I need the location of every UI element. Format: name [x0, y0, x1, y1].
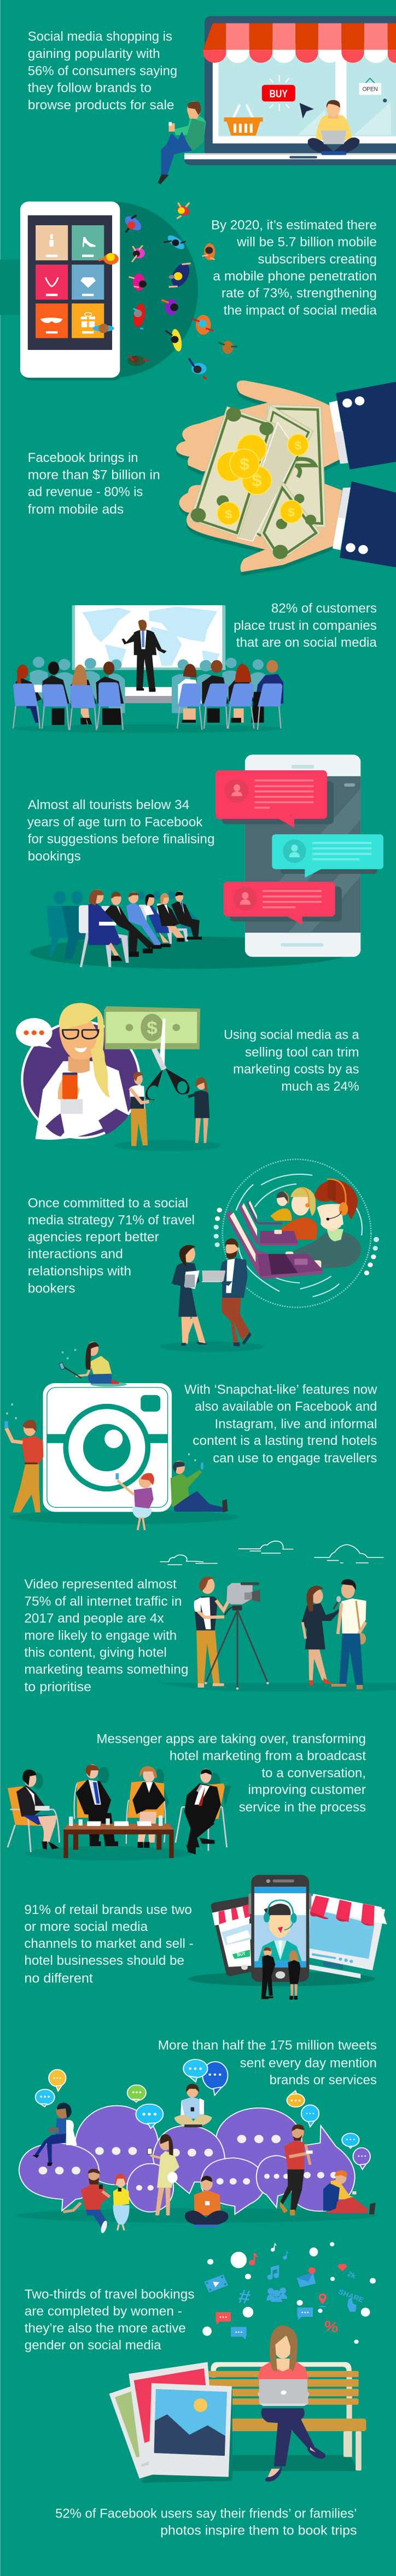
text: tweets: brands or services	[270, 2073, 377, 2087]
coins: $	[294, 439, 302, 452]
audience silhouettes	[30, 657, 266, 713]
text: shopping	[28, 30, 177, 113]
section 2: revenue and trust	[13, 380, 396, 733]
seated panellist 1	[8, 1770, 60, 1852]
ground shadow	[16, 2208, 377, 2223]
button: buy	[262, 75, 295, 111]
text: facebook photos	[55, 2506, 357, 2538]
text: mobile subscribers	[211, 218, 377, 318]
text: strategy: agencies report better	[28, 1230, 159, 1245]
text: messenger: improving customer	[248, 1783, 366, 1797]
text: snapchat features: also available on Facebook and	[195, 1400, 377, 1414]
ground shadow	[160, 1342, 264, 1352]
icons: chat	[216, 2308, 313, 2340]
text: trust: that are on social media	[236, 636, 377, 650]
text: snapchat features: With ‘Snapchat-like’ features now	[184, 1383, 377, 1397]
social media icons	[202, 2242, 376, 2344]
text: trust: place trust in companies	[234, 619, 377, 633]
illustration: panel discussion	[8, 1764, 231, 1860]
text: facebook revenue: from mobile ads	[28, 502, 124, 517]
sign: open: OPEN	[363, 86, 378, 92]
seated panellist 4	[176, 1769, 227, 1854]
icon: instagram style camera	[43, 1383, 172, 1512]
text: mobile subscribers: rate of 73%, strengthening	[222, 286, 377, 301]
ground shadow under people	[115, 1140, 221, 1151]
person: reporter	[302, 1585, 341, 1685]
text: video: to prioritise	[24, 1680, 91, 1694]
text: strategy	[28, 1196, 195, 1296]
icon: share	[337, 2287, 365, 2312]
ground shadow	[30, 936, 349, 969]
text: trust: 82% of customers	[271, 601, 377, 616]
text: facebook revenue: more than $7 billion in	[28, 468, 160, 482]
sign: open	[359, 78, 387, 102]
text: snapchat features	[184, 1383, 377, 1466]
illustration: call centre circle	[214, 1160, 379, 1307]
text: messenger: Messenger apps are taking over, transforming	[96, 1732, 366, 1746]
icon: cursor	[300, 103, 314, 119]
text: video: 2017 and people are 4x	[24, 1612, 164, 1626]
person: man in red shirt	[4, 1404, 43, 1512]
landscape photo	[148, 2383, 232, 2477]
person: woman sitting front	[115, 1473, 154, 1530]
coins: $	[288, 506, 295, 519]
person: bearded man	[201, 1239, 252, 1346]
text: mobile subscribers: By 2020, it’s estimated there	[211, 218, 377, 232]
text: trust	[234, 601, 377, 650]
text: selling tool: much as 24%	[281, 1080, 359, 1094]
text: women: they’re also the more active	[25, 2321, 186, 2335]
section 7: women travellers and photos	[25, 2242, 376, 2538]
cyan bubble	[272, 834, 383, 877]
illustration: phone with shop tiles	[20, 202, 122, 380]
illustration: shop front laptop	[184, 16, 396, 165]
person: business woman	[172, 1245, 207, 1346]
text: facebook revenue	[28, 451, 160, 517]
left phone	[211, 1896, 253, 1976]
camera on tripod	[205, 1582, 269, 1690]
text: retail brands: channels to market and sell -	[24, 1936, 194, 1951]
people seen from above	[93, 203, 237, 379]
illustration: presentation with audience	[13, 605, 283, 733]
bubble shadows	[222, 781, 377, 922]
text: selling tool: selling tool can trim	[245, 1045, 359, 1059]
text: snapchat features: Instagram, live and informal	[214, 1417, 377, 1431]
text: strategy: interactions and	[28, 1247, 123, 1261]
small man	[129, 1072, 149, 1146]
text: messenger: hotel marketing from a broadcast	[170, 1749, 366, 1763]
ground shadow: camera scene	[9, 1510, 238, 1524]
button: buy: BUY	[270, 89, 288, 100]
text: video: this content, giving hotel	[24, 1646, 167, 1660]
coins: $	[225, 508, 232, 521]
couple looking at phone	[261, 1947, 300, 2000]
text: shopping: they follow brands to	[28, 81, 152, 96]
text: facebook revenue: Facebook brings in	[28, 451, 138, 465]
text: tourists	[27, 798, 214, 864]
seated panellist 2	[74, 1764, 125, 1846]
section 3: facebook suggestions	[16, 754, 383, 1151]
icon: heart count	[338, 2264, 358, 2280]
agent on screen	[258, 1900, 302, 1961]
text: women: are completed by women -	[25, 2304, 182, 2319]
icon: location pin	[319, 2293, 327, 2307]
person: woman in yellow	[113, 2174, 130, 2230]
icon: shopping basket	[224, 106, 263, 136]
illustration: big chat bubbles	[19, 2106, 355, 2214]
text: mobile subscribers: a mobile phone penetration	[213, 270, 377, 284]
text: snapchat features: content is a lasting trend hotels	[193, 1434, 377, 1448]
text: strategy: relationships with	[28, 1264, 131, 1279]
text: facebook photos: photos inspire them to book trips	[160, 2523, 357, 2538]
coins	[217, 434, 308, 525]
left phone: BUY	[236, 1951, 246, 1958]
person: bearded man with phone	[63, 2169, 110, 2234]
text: retail brands: hotel businesses should be	[24, 1953, 184, 1968]
text: video: marketing teams something	[24, 1662, 188, 1677]
text: strategy: Once committed to a social	[28, 1196, 188, 1210]
person: woman on bench	[258, 2325, 325, 2481]
platform	[124, 687, 174, 696]
text: women	[25, 2287, 195, 2352]
text: messenger: service in the process	[239, 1800, 366, 1814]
operator large	[226, 1179, 361, 1279]
seated panellist 3	[126, 1766, 165, 1848]
text: tweets	[158, 2038, 377, 2087]
text: shopping: browse products for sale	[28, 98, 174, 113]
text: messenger: to a conversation,	[261, 1766, 366, 1781]
text: facebook photos: 52% of Facebook users say their friends’ or families’	[55, 2506, 357, 2521]
text: messenger	[96, 1732, 366, 1814]
icon: hashtag: #	[237, 2285, 252, 2308]
person: man sitting on bubble	[174, 2084, 212, 2127]
text: tweets: More than half the 175 million tweets	[158, 2038, 377, 2053]
person: woman in dress	[148, 2134, 179, 2215]
person: cameraman	[194, 1577, 229, 1688]
illustration: devices with shop	[211, 1875, 387, 2000]
icons: music notes	[249, 2243, 288, 2280]
band behind phone	[0, 260, 25, 315]
text: tourists: bookings	[28, 850, 81, 864]
text: snapchat features: can use to engage travellers	[213, 1451, 377, 1466]
map board	[72, 605, 225, 670]
coins: $	[252, 471, 262, 490]
text: strategy: media strategy 71% of travel	[28, 1213, 195, 1227]
presenter	[122, 619, 167, 692]
ground shadow	[159, 1683, 396, 1691]
scissors	[145, 1018, 190, 1100]
text: retail brands: 91% of retail brands use two	[24, 1902, 192, 1917]
illustration: bench	[207, 2362, 366, 2471]
section 4: strategy and snapchat	[4, 1160, 379, 1530]
text: shopping: Social media shopping is	[28, 30, 172, 44]
person: girl with selfie stick	[59, 1342, 127, 1387]
people	[89, 889, 202, 961]
text: video: Video represented almost	[24, 1577, 177, 1591]
text: retail brands	[24, 1902, 194, 1986]
text: women: gender on social media	[25, 2338, 161, 2352]
red bubble lower	[224, 882, 335, 925]
red photo	[129, 2362, 214, 2467]
text: mobile subscribers: the impact of social media	[224, 303, 377, 318]
person: man with laptop	[308, 100, 359, 155]
illustration: photo prints	[109, 2362, 232, 2483]
illustration: phone with chat bubbles	[216, 754, 383, 957]
person: bearded man standing	[280, 2124, 313, 2215]
clouds	[160, 1541, 383, 1565]
section 1: online shop laptop	[0, 16, 396, 380]
text: shopping: gaining popularity with	[28, 47, 160, 61]
text: selling tool: marketing costs by as	[233, 1062, 359, 1076]
section 5: video and messenger	[8, 1541, 396, 1860]
icon: envelope	[297, 2267, 316, 2287]
banknotes	[189, 405, 326, 562]
person: man in orange	[185, 2176, 228, 2227]
person: sitting man with backpack	[323, 2170, 376, 2214]
text: video	[24, 1577, 188, 1694]
text: tourists: for suggestions before finalising	[28, 832, 214, 846]
icon: percent: %	[323, 2318, 340, 2336]
person: interviewee	[331, 1579, 366, 1689]
operator middle	[238, 1187, 318, 1246]
illustration: seated people row	[46, 889, 202, 967]
icon: video film	[204, 2274, 228, 2292]
person: man sitting in green	[171, 1454, 228, 1512]
text: facebook revenue: ad revenue - 80% is	[28, 485, 143, 499]
text: women: Two-thirds of travel bookings	[25, 2287, 195, 2302]
person: man on phone	[158, 101, 206, 184]
text: tweets: sent every day mention	[240, 2056, 377, 2070]
bubble dots	[39, 2135, 337, 2191]
text: mobile subscribers: will be 5.7 billion mobile	[236, 235, 377, 249]
text: mobile subscribers: subscribers creating	[258, 252, 377, 267]
illustration: hands holding money	[176, 380, 396, 576]
text: selling tool	[224, 1028, 359, 1094]
centre phone	[248, 1875, 311, 1982]
banknote	[104, 1006, 200, 1049]
monitor	[310, 1894, 387, 1978]
seated audience	[13, 660, 283, 730]
green photo	[109, 2380, 188, 2479]
illustration: woman and scissors cutting money	[16, 1003, 221, 1151]
text: tourists: years of age turn to Facebook	[27, 815, 203, 829]
woman portrait	[58, 1003, 110, 1114]
speech bubble	[16, 1018, 53, 1048]
text: video: 75% of all internet traffic in	[24, 1595, 182, 1609]
text: selling tool: Using social media as a	[224, 1028, 359, 1042]
text: tourists: Almost all tourists below 34	[28, 798, 190, 812]
small woman	[188, 1078, 209, 1143]
text: shopping: 56% of consumers saying	[28, 64, 177, 78]
person: woman with tablet	[32, 2103, 77, 2166]
section 6: retail brands and tweets	[16, 1875, 387, 2234]
shadow circle	[24, 202, 198, 378]
chairs	[79, 904, 188, 967]
text: video: more likely to engage with	[24, 1629, 177, 1643]
ground shadow	[188, 1971, 375, 1986]
shadows	[33, 1767, 231, 1812]
icon: heart count: 2k	[346, 2270, 358, 2280]
chairs	[13, 682, 282, 708]
text: retail brands: or more social media	[24, 1919, 148, 1934]
icon: group	[266, 2287, 287, 2302]
red bubble	[216, 770, 327, 828]
banknote: $	[147, 1018, 158, 1038]
small speech bubbles	[36, 2059, 370, 2169]
icon: share: SHARE	[337, 2287, 365, 2304]
operator small	[247, 1192, 292, 1224]
table	[63, 1816, 174, 1858]
text: strategy: bookers	[28, 1281, 75, 1296]
text: retail brands: no different	[24, 1971, 93, 1986]
coins: $	[240, 455, 249, 473]
